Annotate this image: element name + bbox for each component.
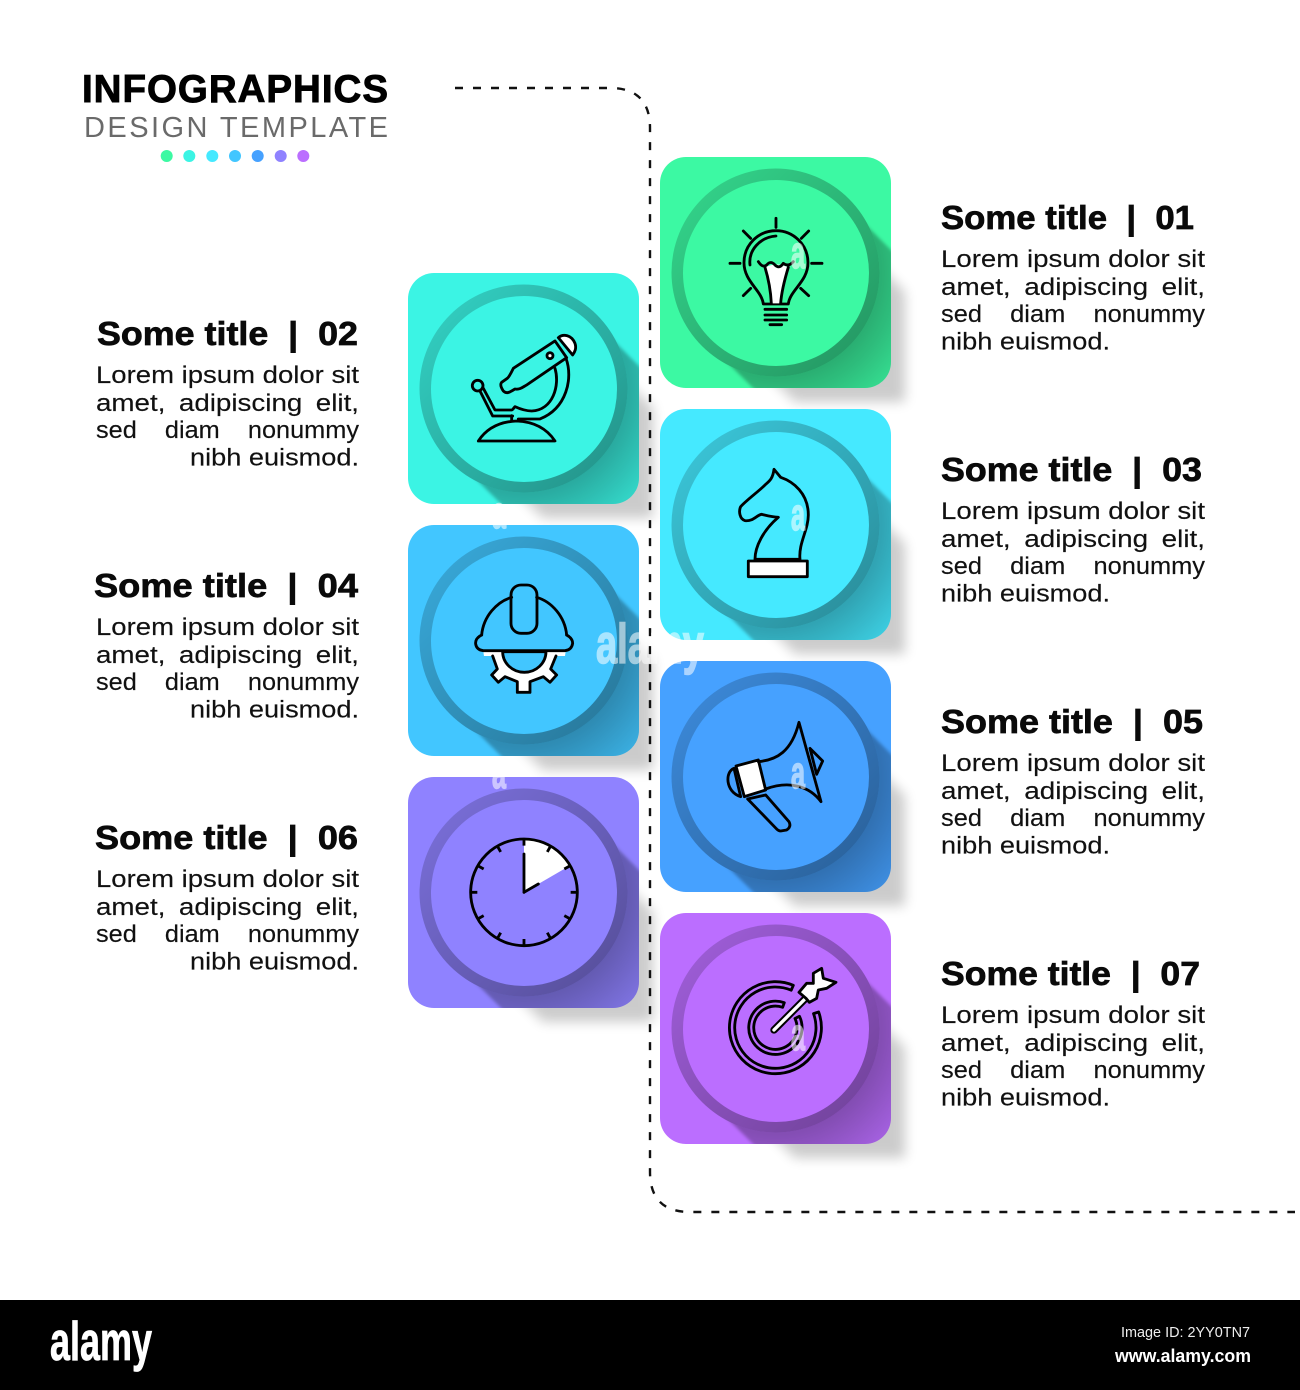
text block 02: nibh euismod. [190, 444, 359, 472]
text block 04: sed diam nonummy [96, 669, 359, 696]
icon: megaphone [728, 722, 823, 831]
text block 05: Some title | 05 [941, 703, 1203, 740]
text block 06: Lorem ipsum dolor sit [96, 866, 359, 893]
watermark overlay: a [791, 747, 806, 798]
text block 05: sed diam nonummy [941, 805, 1205, 832]
text block 03 [941, 451, 1205, 608]
text block 02: Lorem ipsum dolor sit [96, 362, 359, 389]
text block 01: Some title | 01 [941, 199, 1194, 236]
text block 04 [94, 567, 359, 724]
icon: clock [471, 839, 577, 946]
footer bar [0, 1300, 1300, 1390]
image id: Image ID: 2YY0TN7 [1121, 1324, 1250, 1341]
text block 01: sed diam nonummy [941, 301, 1205, 328]
text block 05: Lorem ipsum dolor sit [941, 750, 1205, 777]
card 03: chess knight [660, 409, 910, 660]
text block 04: nibh euismod. [190, 696, 359, 724]
card 05: megaphone [660, 661, 910, 912]
text block 04: Lorem ipsum dolor sit [96, 614, 359, 641]
card 02: microscope [408, 273, 658, 524]
watermark overlay: a [791, 489, 806, 540]
text block 03: nibh euismod. [941, 580, 1110, 608]
text block 07: nibh euismod. [941, 1084, 1110, 1112]
watermark overlay: alamy [596, 612, 704, 675]
text block 04: Some title | 04 [94, 567, 359, 604]
text block 07: Lorem ipsum dolor sit [941, 1002, 1205, 1029]
text block 07 [941, 955, 1205, 1112]
text block 03: Some title | 03 [941, 451, 1202, 488]
card 07: target with arrow [660, 913, 910, 1164]
card 04: helmet and gear [408, 525, 658, 776]
text block 05: nibh euismod. [941, 832, 1110, 860]
text block 02 [96, 315, 359, 472]
text block 03: sed diam nonummy [941, 553, 1205, 580]
text block 04: amet, adipiscing elit, [96, 642, 359, 669]
text block 06: Some title | 06 [95, 819, 358, 856]
card 01: light bulb [660, 157, 910, 408]
text block 06: sed diam nonummy [96, 921, 359, 948]
icon: light bulb [730, 218, 822, 325]
text block 05 [941, 703, 1205, 860]
text block 06: nibh euismod. [190, 948, 359, 976]
text block 03: amet, adipiscing elit, [941, 526, 1205, 553]
text block 05: amet, adipiscing elit, [941, 778, 1205, 805]
icon: helmet and gear [476, 585, 573, 692]
card 06: clock [408, 777, 658, 1028]
icon: chess knight [740, 469, 808, 577]
heading: infographics: INFOGRAPHICS [82, 68, 388, 111]
watermark overlay [492, 227, 806, 1060]
colour dots row [161, 150, 309, 162]
icon: microscope [472, 335, 576, 441]
footer logo: alamy [50, 1310, 152, 1372]
subheading: design template: DESIGN TEMPLATE [84, 112, 388, 144]
title block [82, 68, 388, 162]
watermark overlay: a [492, 747, 507, 798]
text block 02: sed diam nonummy [96, 417, 359, 444]
text block 03: Lorem ipsum dolor sit [941, 498, 1205, 525]
watermark overlay: a [492, 487, 507, 538]
text block 07: Some title | 07 [941, 955, 1200, 992]
text block 01 [941, 199, 1205, 356]
text block 07: sed diam nonummy [941, 1057, 1205, 1084]
text block 06 [95, 819, 359, 976]
text block 01: Lorem ipsum dolor sit [941, 246, 1205, 273]
dashed connector line [455, 88, 1295, 1212]
icon: target with arrow [729, 968, 836, 1074]
text block 01: amet, adipiscing elit, [941, 274, 1205, 301]
text block 02: amet, adipiscing elit, [96, 390, 359, 417]
watermark overlay: a [791, 1009, 806, 1060]
text block 06: amet, adipiscing elit, [96, 894, 359, 921]
watermark overlay: a [791, 227, 806, 278]
website: www.alamy.com [1114, 1346, 1251, 1366]
text block 07: amet, adipiscing elit, [941, 1030, 1205, 1057]
text block 02: Some title | 02 [97, 315, 358, 352]
text block 01: nibh euismod. [941, 328, 1110, 356]
